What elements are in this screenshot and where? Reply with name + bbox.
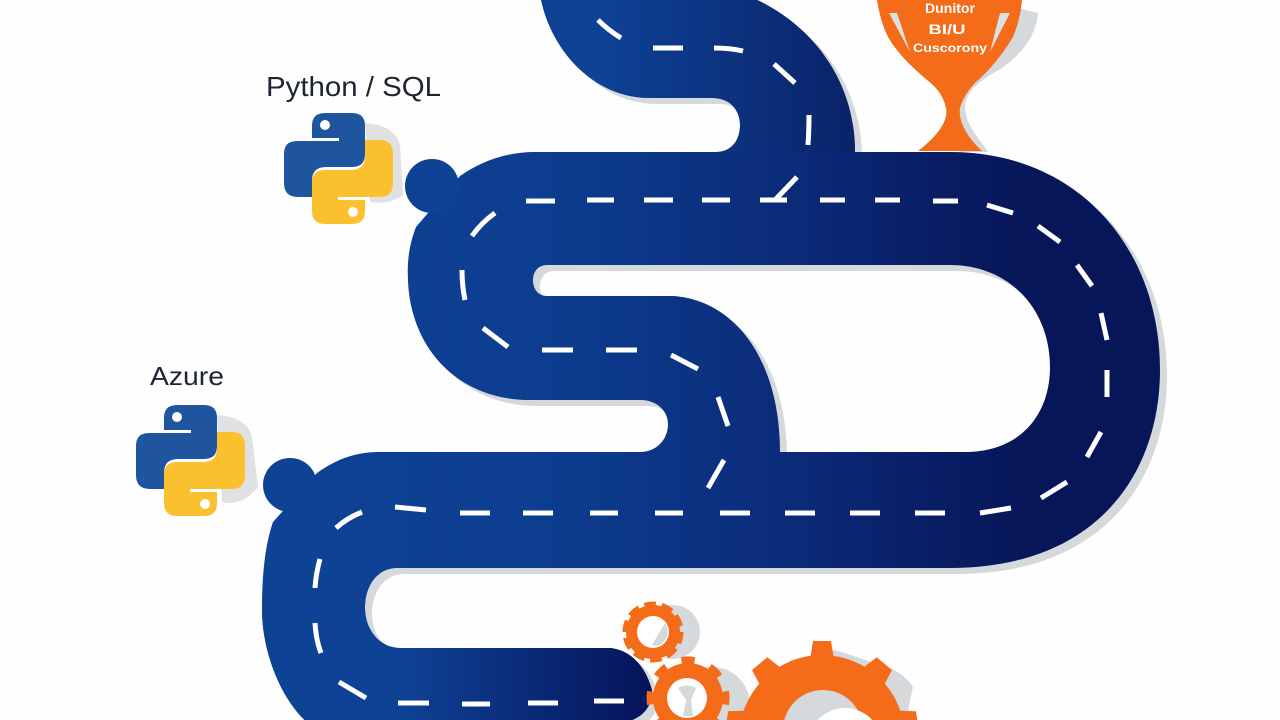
icon: trophy xyxy=(877,0,1038,152)
trophy line 1: Dunitor xyxy=(925,0,976,16)
logo yellow half xyxy=(312,140,393,224)
medium gear xyxy=(651,661,725,720)
gear shadows xyxy=(646,605,913,720)
trophy cup xyxy=(877,0,1022,151)
trophy text xyxy=(913,0,987,55)
logo yellow half xyxy=(164,432,245,516)
logo eye top xyxy=(320,120,330,130)
road centre dashes xyxy=(315,20,1107,704)
large gear xyxy=(724,641,920,720)
icon: gears xyxy=(625,604,920,720)
logo eye bottom xyxy=(348,207,358,217)
road knob lower xyxy=(263,458,317,512)
icon: python logo lower xyxy=(136,405,258,516)
trophy right slit xyxy=(990,13,1010,52)
logo shadow xyxy=(217,415,258,503)
road knob upper xyxy=(405,159,459,213)
bottom road section shading xyxy=(250,600,670,720)
road body xyxy=(262,0,1160,720)
label: Azure: Azure xyxy=(150,361,224,391)
trophy line 3: Cuscorony xyxy=(913,41,987,55)
label: Python / SQL: Python / SQL xyxy=(266,71,441,102)
small gear xyxy=(625,604,681,660)
logo eye bottom xyxy=(200,499,210,509)
logo shadow xyxy=(365,123,403,203)
logo eye top xyxy=(172,412,182,422)
winding road xyxy=(250,0,1160,720)
trophy left slit xyxy=(889,13,910,52)
road shadow xyxy=(269,0,1167,720)
icon: python logo upper xyxy=(284,113,403,224)
trophy shadow xyxy=(950,8,1038,152)
trophy line 2: BI/U xyxy=(928,21,966,37)
top road section shading xyxy=(530,0,870,152)
logo blue half xyxy=(284,113,365,197)
logo blue half xyxy=(136,405,217,489)
